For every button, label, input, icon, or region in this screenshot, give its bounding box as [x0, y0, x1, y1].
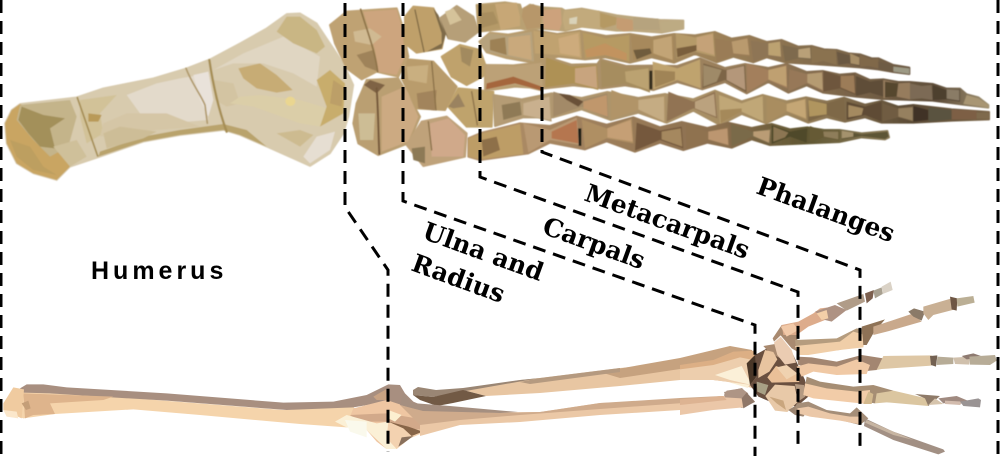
modern wrist and hand bones — [680, 282, 997, 454]
label: Humerus: Humerus — [91, 257, 227, 285]
digit 5 — [468, 117, 889, 160]
modern little finger — [795, 402, 945, 454]
label: Phalanges: Phalanges — [753, 171, 899, 248]
digit 2 — [479, 30, 909, 74]
label: Ulna and Radius: Radius — [408, 248, 509, 309]
modern middle finger — [797, 353, 997, 377]
fossil digit rows (phalanges) — [468, 2, 989, 160]
modern ring finger — [803, 377, 981, 407]
label: Ulna and Radius: Ulna and — [419, 216, 547, 287]
upper forearm end at wrist — [680, 351, 760, 385]
label: Carpals: Carpals — [539, 211, 649, 275]
fossil humerus — [5, 13, 353, 180]
modern upper forearm bone — [413, 346, 752, 406]
fossil carpal bones — [402, 6, 493, 166]
carpals and ulna/radius fossil blocks — [330, 6, 493, 166]
lower forearm end at wrist — [680, 388, 755, 415]
modern ulna and radius shafts — [400, 346, 755, 436]
fossil radius — [353, 78, 420, 155]
modern lower forearm bone — [400, 388, 755, 436]
modern thumb — [781, 282, 893, 337]
modern humerus bone — [3, 384, 433, 449]
wrist bones — [750, 325, 808, 417]
digit 4 — [493, 90, 989, 126]
modern index finger — [795, 296, 975, 355]
label: Metacarpals: Metacarpals — [581, 178, 754, 265]
digit 3 — [485, 57, 988, 108]
digit 1 — [477, 2, 683, 33]
fossil ulna — [330, 8, 408, 79]
